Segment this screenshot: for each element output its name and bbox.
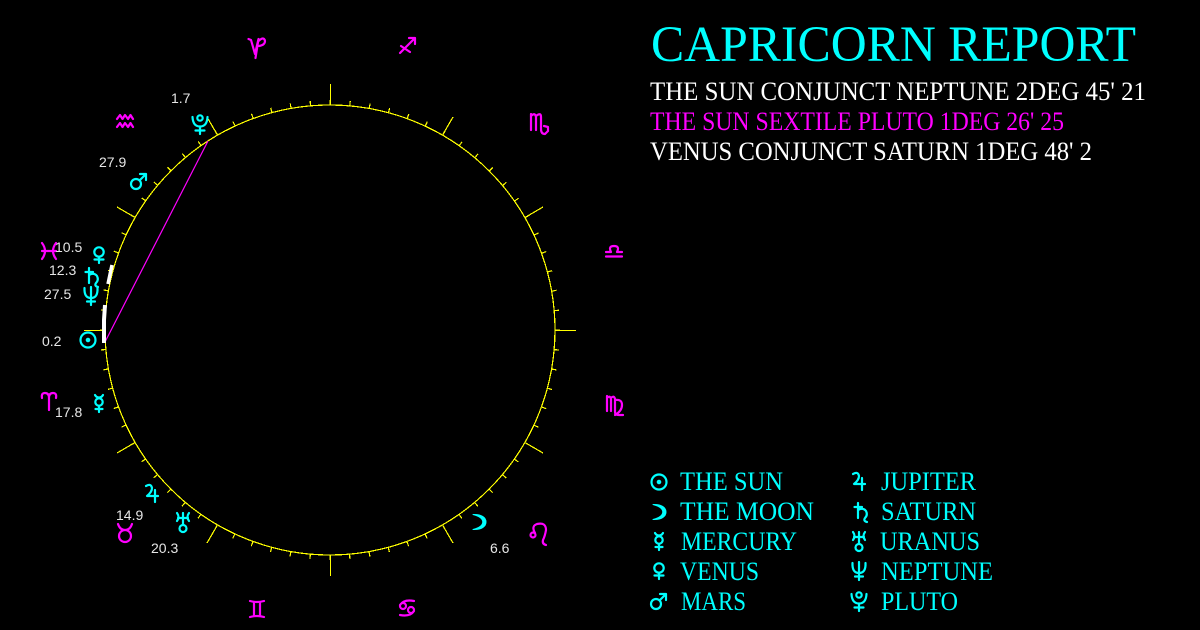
sign: pisces <box>42 243 56 259</box>
aspect: sun conjunct neptune: THE SUN CONJUNCT NEPTUNE 2DEG 45' 21 <box>650 77 1146 106</box>
planet: neptune <box>84 287 98 305</box>
aspect line: sun sextile pluto <box>105 141 208 342</box>
planet: sun <box>80 332 96 348</box>
sign: gemini <box>250 601 264 617</box>
label: uranus degrees: 20.3 <box>151 540 178 556</box>
chart wheel <box>84 84 576 576</box>
label: neptune degrees: 27.5 <box>44 286 71 302</box>
title: CAPRICORN REPORT <box>651 17 1136 73</box>
planet: uranus <box>177 513 189 532</box>
label: jupiter degrees: 14.9 <box>116 507 143 523</box>
planet degree labels <box>42 90 510 556</box>
sign: virgo <box>607 396 623 415</box>
legend icon: jupiter <box>853 473 865 490</box>
label: moon degrees: 6.6 <box>490 540 510 556</box>
legend names <box>680 467 993 616</box>
planet: moon <box>473 514 486 530</box>
planet: jupiter <box>146 485 158 502</box>
zodiac signs <box>42 38 623 617</box>
label: sun degrees: 0.2 <box>42 333 62 349</box>
legend icon: venus <box>654 563 664 579</box>
legend icon: uranus <box>853 532 865 551</box>
sign: sagittarius <box>400 38 415 53</box>
planet: saturn <box>86 268 98 287</box>
aspect list <box>650 77 1146 166</box>
sign: capricorn <box>248 38 265 58</box>
sign: aries <box>42 393 56 410</box>
planet: mercury <box>95 395 103 412</box>
legend name: mercury: MERCURY <box>681 527 797 556</box>
legend name: the sun: THE SUN <box>680 467 783 496</box>
aspect arc: venus conjunct saturn <box>108 265 112 284</box>
label: saturn degrees: 12.3 <box>49 262 76 278</box>
aspect arc: sun conjunct neptune <box>104 305 105 343</box>
wheel circle <box>105 105 555 555</box>
legend icon: mercury <box>655 533 663 550</box>
aspect: venus conjunct saturn: VENUS CONJUNCT SATURN 1DEG 48' 2 <box>650 137 1092 166</box>
legend icons <box>651 473 867 611</box>
sign: scorpio <box>531 114 548 134</box>
sign: libra <box>606 246 622 256</box>
planet: pluto <box>192 115 208 134</box>
label: mars degrees: 27.9 <box>99 154 126 170</box>
planets on chart <box>80 115 486 532</box>
leo tail <box>533 524 546 545</box>
legend name: mars: MARS <box>681 587 746 616</box>
legend icon: mars <box>651 594 666 609</box>
legend name: jupiter: JUPITER <box>881 467 977 496</box>
minor degree ticks <box>102 102 558 558</box>
legend icon: moon <box>653 504 666 520</box>
legend icon: saturn <box>854 503 867 522</box>
leo eye <box>530 532 536 538</box>
sign: aquarius <box>117 115 133 127</box>
sign: taurus <box>118 524 132 542</box>
legend icon: sun <box>652 474 666 490</box>
legend name: uranus: URANUS <box>880 527 980 556</box>
planet: mars <box>131 174 146 189</box>
legend name: pluto: PLUTO <box>881 587 958 616</box>
label: mercury degrees: 17.8 <box>55 404 82 420</box>
sign: cancer <box>400 600 414 616</box>
major sign ticks <box>84 84 576 576</box>
planet: venus <box>94 247 104 263</box>
legend <box>651 467 993 616</box>
label: venus degrees: 10.5 <box>55 239 82 255</box>
legend name: venus: VENUS <box>680 557 759 586</box>
legend icon: neptune <box>852 562 866 580</box>
sign: leo <box>530 524 546 545</box>
legend name: saturn: SATURN <box>881 497 976 526</box>
legend name: the moon: THE MOON <box>680 497 814 526</box>
aspect: sun sextile pluto: THE SUN SEXTILE PLUTO 1DEG 26' 25 <box>650 107 1064 136</box>
legend icon: pluto <box>852 592 866 611</box>
legend name: neptune: NEPTUNE <box>881 557 993 586</box>
label: pluto degrees: 1.7 <box>171 90 191 106</box>
